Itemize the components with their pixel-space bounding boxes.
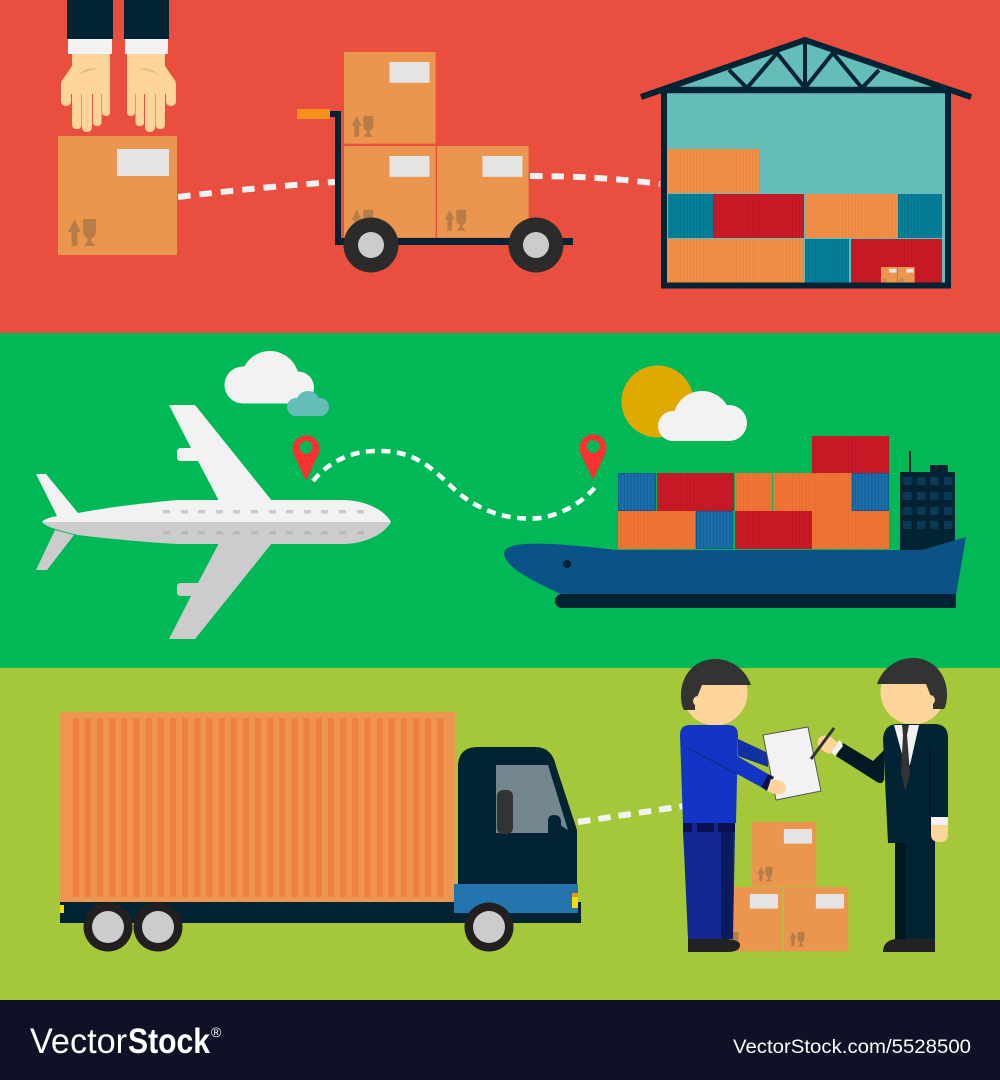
footer bar [0, 1000, 1000, 1080]
red panel background [0, 0, 1000, 334]
icon: teal cloud [287, 391, 329, 416]
footer brand text: Stock [128, 1022, 210, 1061]
icon: container ship [504, 436, 966, 608]
dashed route: box to trolley [178, 182, 335, 197]
dashed route: trolley to warehouse [530, 176, 660, 184]
figure: worker in blue [680, 659, 821, 952]
footer image id: VectorStock.com/5528500 [733, 1037, 971, 1058]
icon: parcel box under hands [58, 136, 177, 255]
icon: stacked boxes [718, 822, 848, 951]
icon: hand trolley with boxes [297, 52, 573, 272]
icon: sun [622, 366, 694, 438]
dashed flight route [313, 451, 596, 519]
dashed route: truck to workers [578, 806, 684, 822]
footer brand text: ® [211, 1024, 222, 1040]
panel: road delivery and handover [60, 658, 948, 952]
icon: warehouse with containers [641, 38, 971, 286]
lime panel background [0, 668, 1000, 1000]
footer brand text [30, 1022, 222, 1061]
panel: warehouse and packing [58, 0, 971, 286]
icon: hands in suit sleeves [61, 0, 176, 132]
icon: airplane [36, 405, 391, 639]
icon: delivery truck [60, 712, 581, 952]
footer brand text: Vector [30, 1022, 127, 1061]
panel: air and sea freight [36, 351, 966, 639]
icon: map pin at plane [293, 435, 320, 481]
icon: white cloud [224, 351, 314, 409]
figure: businessman in suit [811, 658, 948, 952]
icon: map pin at ship [580, 434, 606, 480]
green panel background [0, 333, 1000, 668]
icon: cloud over sun [658, 391, 747, 441]
